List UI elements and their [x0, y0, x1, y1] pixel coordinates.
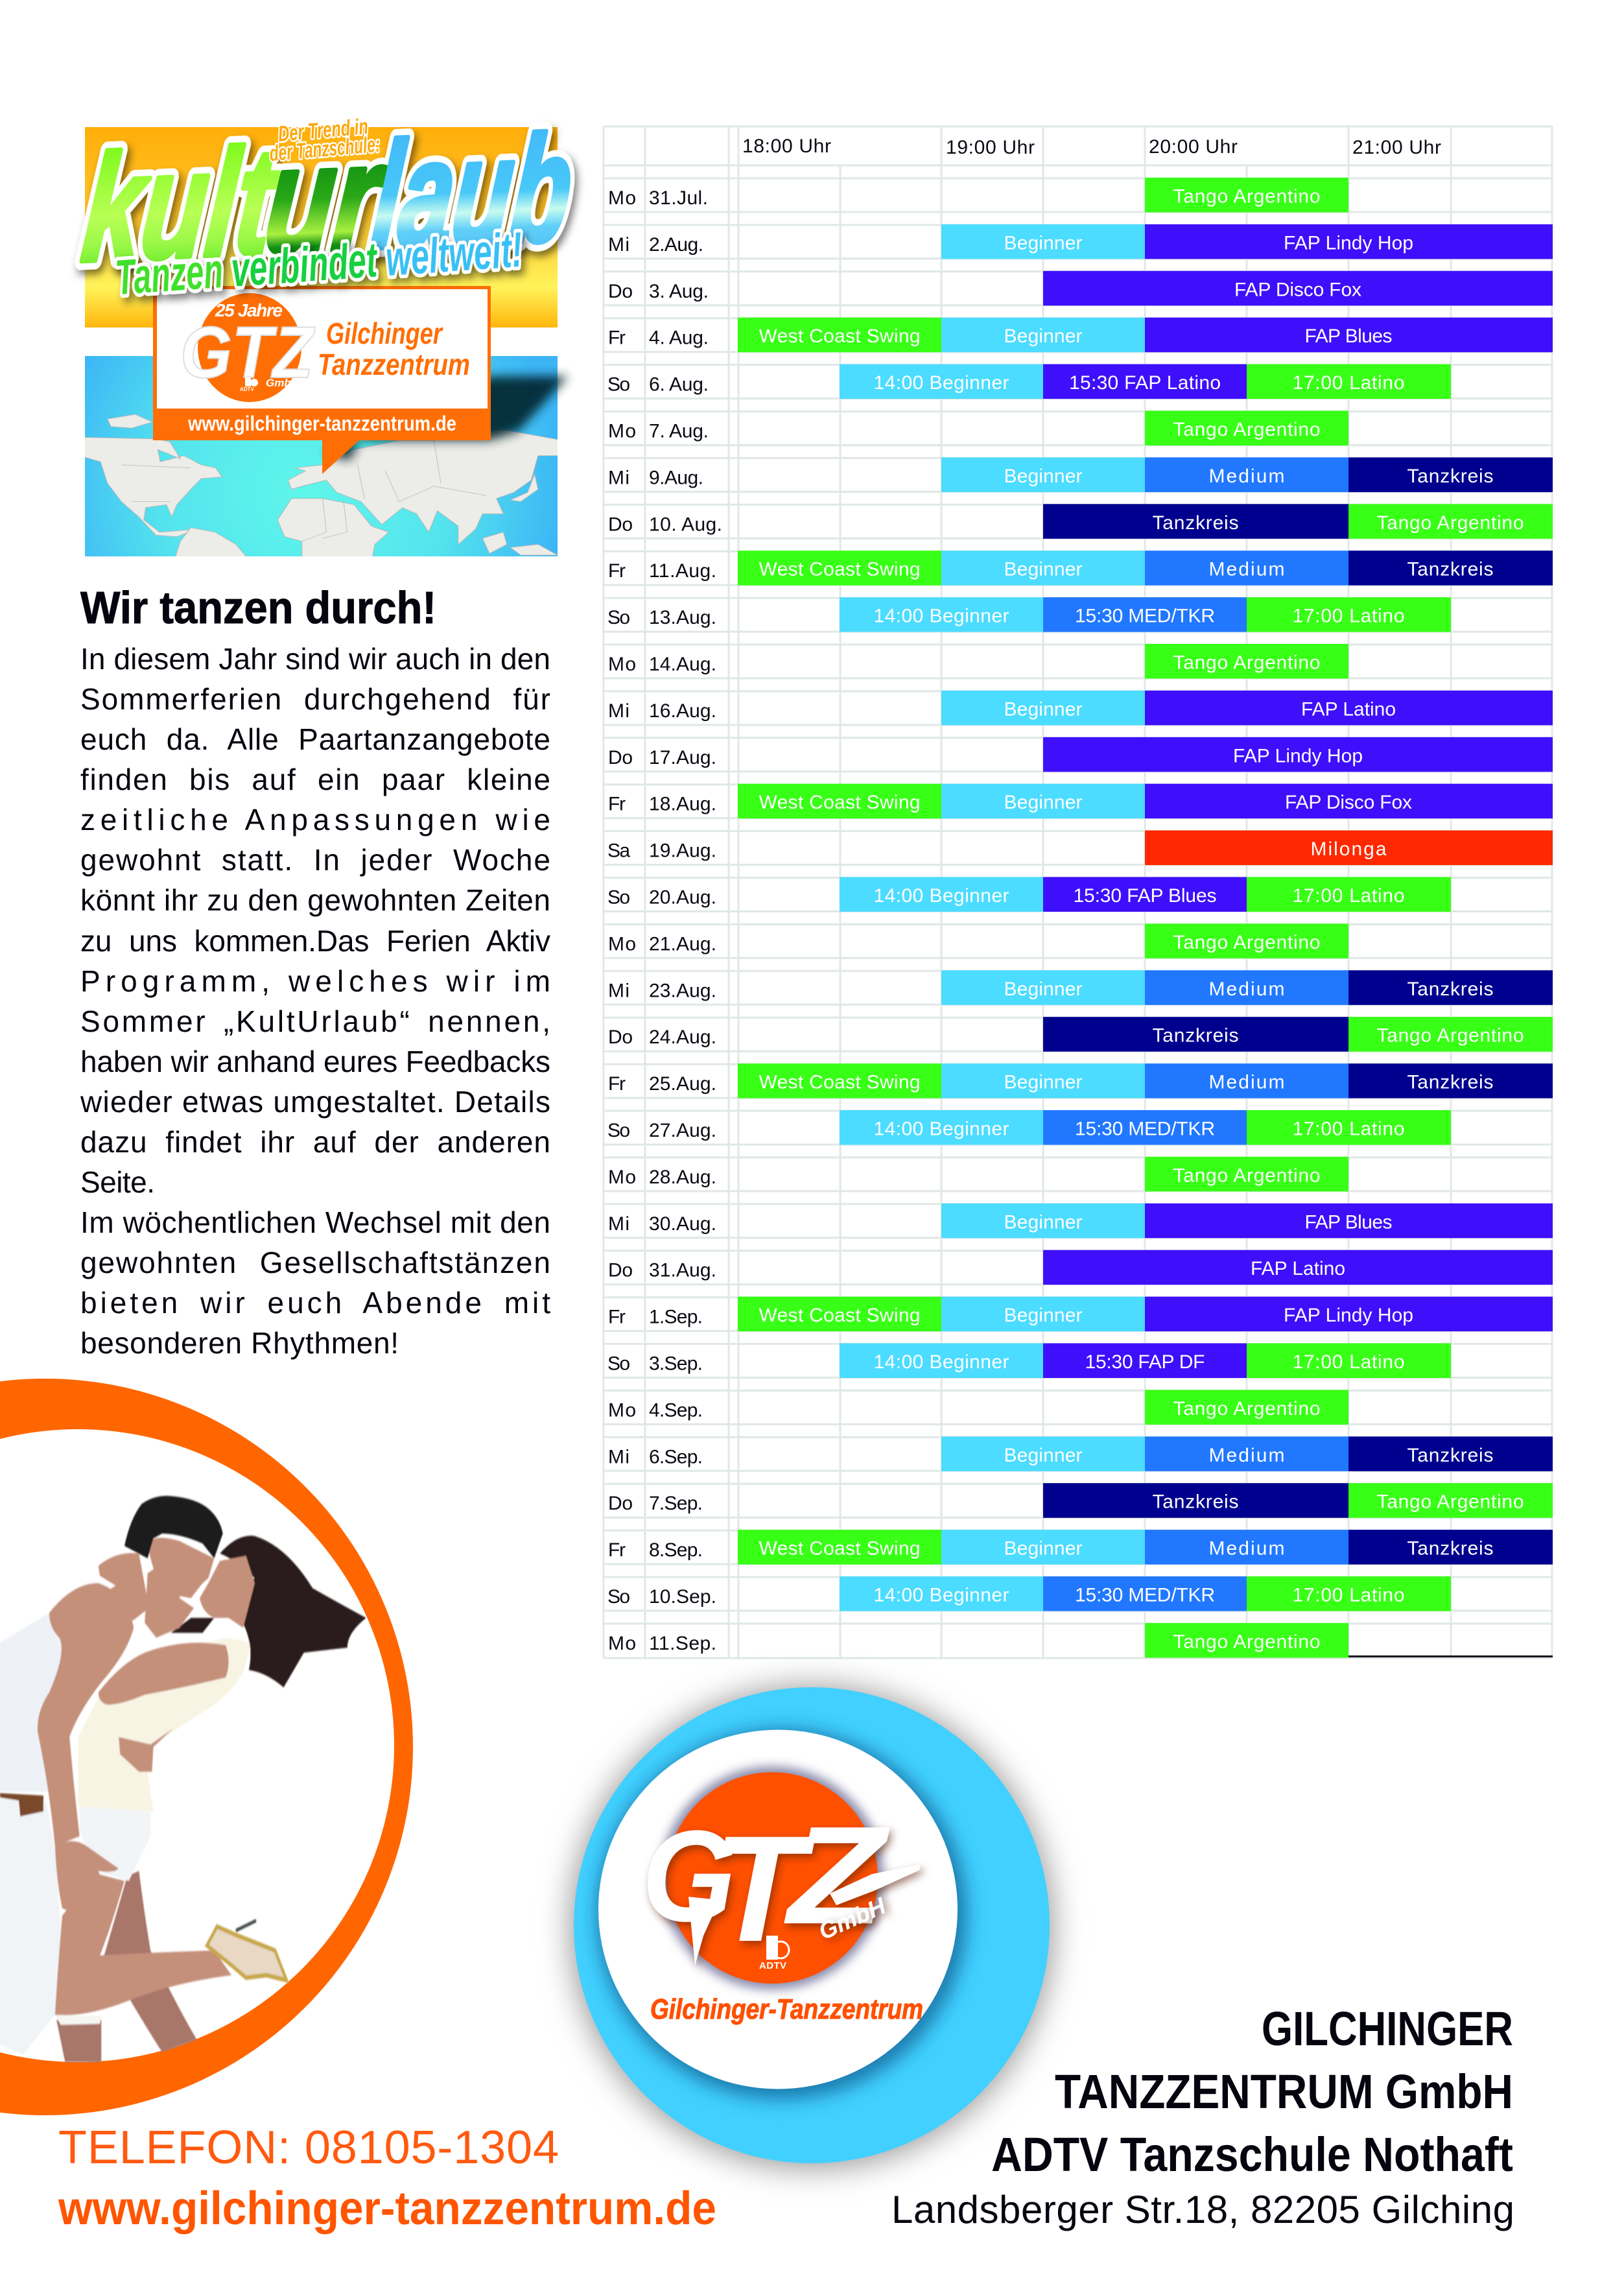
kulturlaub title: ur — [259, 112, 392, 285]
orange ring with dancing couple — [0, 1379, 413, 2115]
tagline: Der Trend in der Tanzschule: der Tanzschule: — [268, 132, 381, 166]
row: Mo 7. Aug.: Mo — [608, 420, 636, 442]
slogan: Tanzen verbindet weltweit — [113, 222, 524, 305]
body text: euch da. Alle Paartanzangebote — [80, 722, 550, 756]
kulturlaub title: laub — [366, 104, 579, 281]
row: Mo 14.Aug.: 14.Aug. — [649, 654, 716, 675]
row: So 13.Aug.: 13.Aug. — [649, 607, 716, 628]
body text: Sommerferien durchgehend für — [80, 682, 550, 716]
row: Mi 30.Aug.: FAP Blues — [1304, 1211, 1393, 1233]
row: So 3.Sep.: 17:00 Latino — [1293, 1351, 1404, 1373]
time header: 21:00 Uhr — [1352, 137, 1441, 158]
logo: 25 Jahre GTZ: 25 Jahre — [215, 300, 283, 320]
man's hair — [124, 1496, 223, 1558]
world map panel — [80, 356, 562, 563]
row: Mi 9.Aug.: Mi — [608, 467, 630, 488]
logo wordmark: Tanzzentrum — [318, 348, 470, 381]
row: So 3.Sep.: So — [607, 1353, 630, 1375]
row: Fr 25.Aug.: Beginner — [1004, 1072, 1083, 1093]
row: Mo 21.Aug.: Tango Argentino — [1173, 932, 1320, 953]
orange speech bubble — [153, 286, 491, 474]
row: Fr 25.Aug.: 25.Aug. — [649, 1073, 716, 1095]
row: Sa 19.Aug.: Sa — [607, 840, 630, 862]
row: Fr 18.Aug.: 18.Aug. — [649, 794, 716, 815]
row: Sa 19.Aug.: 19.Aug. — [649, 840, 716, 862]
row: Mo 11.Sep.: Tango Argentino — [1173, 1631, 1320, 1652]
body text: gewohnt statt. In jeder Woche — [80, 843, 550, 877]
row: Do 3. Aug.: Do — [608, 281, 633, 302]
man's arm — [38, 1583, 134, 1846]
woman's arm — [99, 1643, 229, 1705]
row: Mi 6.Sep. — [604, 1436, 1553, 1471]
row: Mi 23.Aug.: Medium — [1208, 979, 1285, 1000]
row: Fr 25.Aug.: Fr — [608, 1073, 626, 1095]
row: Do 24.Aug.: 24.Aug. — [649, 1027, 716, 1048]
row: Do 7.Sep.: Tango Argentino — [1377, 1491, 1524, 1513]
row: Fr 25.Aug.: Tanzkreis — [1407, 1072, 1494, 1093]
row: Mo 28.Aug. — [604, 1157, 1553, 1191]
row: Do 7.Sep. — [604, 1483, 1553, 1518]
row: Mi 30.Aug. — [604, 1204, 1553, 1238]
row: Fr 18.Aug.: FAP Disco Fox — [1285, 792, 1412, 813]
row: Do 31.Aug.: FAP Latino — [1251, 1258, 1345, 1279]
row: Do 10. Aug. — [604, 504, 1553, 539]
row: So 3.Sep.: 15:30 FAP DF — [1085, 1351, 1205, 1373]
row: Mo 28.Aug.: Tango Argentino — [1173, 1165, 1320, 1186]
row: Do 7.Sep.: 7.Sep. — [649, 1493, 703, 1514]
row: Do 3. Aug.: FAP Disco Fox — [1234, 279, 1361, 300]
row: Fr 25.Aug.: West Coast Swing — [759, 1072, 921, 1093]
round GTZ logo — [571, 1686, 1053, 2168]
GTZ lettering: Z — [783, 1797, 891, 1953]
woman's hand on neck — [95, 1553, 149, 1620]
row: So 6. Aug.: 6. Aug. — [649, 374, 709, 396]
row: Fr 4. Aug. — [604, 318, 1553, 352]
row: Fr 11.Aug.: 11.Aug. — [649, 560, 716, 582]
slogan: Tanzen verbindet weltweit: verbindet — [229, 232, 380, 298]
row: So 27.Aug.: 17:00 Latino — [1293, 1118, 1404, 1140]
woman's back leg — [104, 1871, 197, 2052]
company address block — [891, 2002, 1514, 2231]
row: Fr 1.Sep.: FAP Lindy Hop — [1284, 1305, 1413, 1326]
slogan: Tanzen verbindet weltweit: weltweit! — [384, 222, 524, 287]
woman's cream top — [78, 1638, 252, 1811]
woman's hand on cheek — [145, 1561, 194, 1638]
row: Do 24.Aug.: Do — [608, 1027, 633, 1048]
logo wordmark: Gilchinger — [326, 316, 443, 350]
white logo panel — [157, 289, 488, 409]
row: Fr 11.Aug.: Fr — [608, 560, 626, 582]
man's face — [148, 1537, 214, 1598]
row: Mo 21.Aug.: 21.Aug. — [649, 933, 716, 955]
time header: 20:00 Uhr — [1149, 136, 1238, 158]
row: Mo 7. Aug. — [604, 411, 1553, 445]
row: Mi 9.Aug.: Medium — [1208, 466, 1285, 487]
row: Mo 11.Sep.: Mo — [608, 1633, 636, 1654]
row: Mi 9.Aug.: 9.Aug. — [649, 467, 703, 488]
row: So 27.Aug. — [604, 1110, 1553, 1145]
row: So 3.Sep.: 3.Sep. — [649, 1353, 703, 1375]
row: Fr 4. Aug.: Fr — [608, 327, 626, 349]
row: Fr 4. Aug.: 4. Aug. — [649, 327, 709, 349]
row: Mi 2.Aug. — [604, 224, 1553, 259]
body text: wieder etwas umgestaltet. Details — [80, 1085, 550, 1119]
row: Fr 8.Sep.: West Coast Swing — [759, 1538, 921, 1560]
body text: zu uns kommen.Das Ferien Aktiv — [80, 924, 550, 958]
row: Do 31.Aug.: Do — [608, 1260, 633, 1281]
row: Mi 6.Sep.: Tanzkreis — [1407, 1445, 1494, 1466]
kulturlaub title: ur — [259, 112, 392, 285]
row: Do 31.Aug.: 31.Aug. — [649, 1260, 716, 1281]
body text: finden bis auf ein paar kleine — [80, 763, 550, 796]
row: Fr 1.Sep. — [604, 1297, 1553, 1331]
table grid — [604, 126, 1553, 1658]
row: Mi 30.Aug.: Beginner — [1004, 1211, 1083, 1233]
GTZ lettering: T — [712, 1805, 816, 1973]
row: So 6. Aug.: 14:00 Beginner — [874, 372, 1009, 394]
row: Mi 16.Aug. — [604, 691, 1553, 725]
row: Mi 9.Aug. — [604, 457, 1553, 492]
row: Fr 25.Aug. — [604, 1063, 1553, 1098]
logo: 25 Jahre GTZ: ADTV — [240, 386, 254, 392]
logo: 25 Jahre GTZ: GTZ — [180, 312, 315, 393]
row: Mi 16.Aug.: Mi — [608, 700, 630, 722]
company address block: GILCHINGER — [1262, 2002, 1513, 2056]
row: Fr 4. Aug.: FAP Blues — [1304, 326, 1393, 347]
row: Do 10. Aug.: 10. Aug. — [649, 514, 722, 535]
row: Mo 7. Aug.: Tango Argentino — [1173, 419, 1320, 440]
row: Mo 14.Aug.: Tango Argentino — [1173, 652, 1320, 673]
woman's face — [200, 1556, 255, 1628]
ADTV badge — [759, 1936, 789, 1971]
woman's shorts — [80, 1807, 150, 1881]
orange ring — [0, 1379, 413, 2115]
logo: 25 Jahre GTZ: GmbH — [266, 377, 300, 389]
row: Mi 23.Aug. — [604, 970, 1553, 1005]
dancing couple photo — [0, 1496, 366, 2062]
row: So 10.Sep.: 17:00 Latino — [1293, 1585, 1404, 1606]
row: Mi 9.Aug.: Tanzkreis — [1407, 466, 1494, 487]
row: So 10.Sep.: 14:00 Beginner — [874, 1585, 1009, 1606]
row: Do 7.Sep.: Tanzkreis — [1153, 1491, 1238, 1513]
row: Do 3. Aug. — [604, 271, 1553, 305]
row: Mi 16.Aug.: 16.Aug. — [649, 700, 716, 722]
row: Mo 14.Aug. — [604, 644, 1553, 678]
company address block: Landsberger Str.18, 82205 Gilching — [891, 2188, 1514, 2231]
dark inner shadow — [596, 1729, 967, 2100]
GTZ lettering — [642, 1797, 921, 1973]
row: Do 17.Aug.: 17.Aug. — [649, 747, 716, 768]
ADTV badge: ADTV — [759, 1960, 786, 1971]
row: Do 3. Aug.: 3. Aug. — [649, 281, 709, 302]
contact: telephone: TELEFON: 08105-1304 — [58, 2122, 559, 2174]
row: So 27.Aug.: 27.Aug. — [649, 1120, 716, 1141]
row: So 13.Aug.: So — [607, 607, 630, 628]
row: Mo 14.Aug.: Mo — [608, 654, 636, 675]
row: So 13.Aug.: 17:00 Latino — [1293, 606, 1404, 627]
row: Mi 2.Aug.: Mi — [608, 234, 630, 255]
Gilchinger-Tanzzentrum wordmark: Gilchinger-Tanzzentrum — [650, 1993, 923, 2025]
grey shadow — [571, 1686, 1053, 2168]
kulturlaub title: kult — [76, 117, 284, 293]
row: Do 10. Aug.: Tanzkreis — [1153, 512, 1238, 534]
row: Fr 8.Sep.: Tanzkreis — [1407, 1538, 1494, 1560]
row: Fr 18.Aug. — [604, 784, 1553, 818]
row: Mi 2.Aug.: Beginner — [1004, 232, 1083, 254]
row: Mi 6.Sep.: Mi — [608, 1446, 630, 1467]
row: Mi 16.Aug.: Beginner — [1004, 698, 1083, 720]
row: So 20.Aug.: So — [607, 887, 630, 908]
kulturlaub title: kult — [76, 117, 284, 293]
man's hand on thigh — [55, 1841, 119, 1918]
row: Fr 8.Sep.: Fr — [608, 1539, 626, 1561]
GTZ lettering: G — [642, 1804, 736, 1949]
row: Do 31.Aug. — [604, 1250, 1553, 1285]
row: So 27.Aug.: 15:30 MED/TKR — [1075, 1118, 1215, 1140]
row: So 13.Aug. — [604, 597, 1553, 632]
row: Mo 28.Aug.: 28.Aug. — [649, 1167, 716, 1188]
row: Fr 11.Aug.: West Coast Swing — [759, 559, 921, 580]
body text: dazu findet ihr auf der anderen — [80, 1125, 550, 1159]
row: Fr 8.Sep.: Beginner — [1004, 1538, 1083, 1560]
heel — [236, 1921, 256, 1930]
row: Fr 11.Aug.: Tanzkreis — [1407, 559, 1494, 580]
row: Fr 4. Aug.: Beginner — [1004, 326, 1083, 347]
body text: könnt ihr zu den gewohnten Zeiten — [80, 883, 550, 917]
row: Do 10. Aug.: Tango Argentino — [1377, 512, 1524, 534]
heading: Wir tanzen durch! — [80, 582, 436, 633]
row: Mo 21.Aug.: Mo — [608, 933, 636, 955]
gold sandal — [207, 1927, 287, 1980]
row: Do 7.Sep.: Do — [608, 1493, 633, 1514]
row: Mi 2.Aug.: 2.Aug. — [649, 234, 703, 255]
row: So 6. Aug.: So — [607, 374, 630, 396]
row: Do 17.Aug.: FAP Lindy Hop — [1233, 745, 1363, 766]
body text: Programm, welches wir im — [80, 964, 550, 998]
logo wordmark — [318, 316, 470, 381]
row: So 3.Sep.: 14:00 Beginner — [874, 1351, 1009, 1373]
body text: zeitliche Anpassungen wie — [80, 803, 550, 837]
row: Mi 6.Sep.: 6.Sep. — [649, 1446, 703, 1467]
row: Mo 4.Sep. — [604, 1390, 1553, 1425]
row: Fr 8.Sep.: 8.Sep. — [649, 1539, 703, 1561]
row: Mo 31.Jul.: 31.Jul. — [649, 187, 708, 209]
row: Mo 31.Jul.: Tango Argentino — [1173, 185, 1320, 208]
row: So 10.Sep.: 15:30 MED/TKR — [1075, 1585, 1215, 1606]
row: So 27.Aug.: So — [607, 1120, 630, 1141]
company address block: ADTV Tanzschule Nothaft — [991, 2128, 1513, 2181]
row: So 13.Aug.: 15:30 MED/TKR — [1075, 606, 1215, 627]
body text: Im wöchentlichen Wechsel mit den — [80, 1205, 550, 1239]
row: Fr 18.Aug.: Beginner — [1004, 792, 1083, 813]
body text: In diesem Jahr sind wir auch in den — [80, 642, 550, 676]
row: Mi 23.Aug.: Beginner — [1004, 979, 1083, 1000]
woman's hair — [220, 1536, 366, 1687]
body text: bieten wir euch Abende mit — [80, 1286, 550, 1320]
row: So 20.Aug. — [604, 877, 1553, 912]
row: So 6. Aug.: 15:30 FAP Latino — [1069, 372, 1221, 394]
row: Do 17.Aug. — [604, 737, 1553, 772]
row: Fr 4. Aug.: West Coast Swing — [759, 326, 921, 347]
row: So 10.Sep.: So — [607, 1586, 630, 1608]
body text: haben wir anhand eures Feedbacks — [80, 1045, 550, 1078]
row: Mo 31.Jul. — [604, 178, 1553, 213]
row: Mi 23.Aug.: Tanzkreis — [1407, 979, 1494, 1000]
row: So 20.Aug.: 15:30 FAP Blues — [1074, 885, 1216, 907]
row: Mi 30.Aug.: Mi — [608, 1213, 630, 1235]
row: Mo 4.Sep.: Tango Argentino — [1173, 1398, 1320, 1419]
row: Mi 2.Aug.: FAP Lindy Hop — [1284, 232, 1413, 254]
contact: website: www.gilchinger-tanzzentrum.de — [58, 2183, 716, 2235]
row: So 20.Aug.: 20.Aug. — [649, 887, 716, 908]
row: Mi 6.Sep.: Medium — [1208, 1445, 1285, 1466]
row: Fr 11.Aug.: Beginner — [1004, 559, 1083, 580]
row: Fr 1.Sep.: 1.Sep. — [649, 1307, 703, 1328]
time header: 19:00 Uhr — [946, 137, 1035, 158]
company address block: TANZZENTRUM GmbH — [1055, 2065, 1513, 2119]
row: Mo 31.Jul.: Mo — [608, 187, 636, 209]
sunset panel — [85, 127, 558, 327]
row: Fr 25.Aug.: Medium — [1208, 1072, 1285, 1093]
man's shirt — [0, 1613, 68, 1792]
tagline: Der Trend in der Tanzschule: Der Trend in — [277, 114, 369, 147]
row: Mo 11.Sep.: 11.Sep. — [649, 1633, 716, 1654]
row: Mo 28.Aug.: Mo — [608, 1167, 636, 1188]
white disc — [598, 1730, 958, 2089]
row: Do 10. Aug.: Do — [608, 514, 633, 535]
woman's lower leg behind — [56, 2020, 101, 2062]
row: So 13.Aug.: 14:00 Beginner — [874, 606, 1009, 627]
belt — [0, 1793, 43, 1816]
woman's raised leg — [55, 1873, 231, 2015]
strands behind hands — [171, 1618, 214, 1633]
row: Mi 6.Sep.: Beginner — [1004, 1445, 1083, 1466]
row: Mo 7. Aug.: 7. Aug. — [649, 420, 709, 442]
body text — [80, 642, 550, 1360]
row: So 10.Sep.: 10.Sep. — [649, 1586, 716, 1608]
row: Do 24.Aug. — [604, 1017, 1553, 1052]
row: Fr 1.Sep.: West Coast Swing — [759, 1305, 921, 1326]
row: So 6. Aug. — [604, 364, 1553, 399]
row: Fr 11.Aug.: Medium — [1208, 559, 1285, 580]
schedule table — [604, 126, 1553, 1658]
row: Mi 30.Aug.: 30.Aug. — [649, 1213, 716, 1235]
row: So 27.Aug.: 14:00 Beginner — [874, 1118, 1009, 1140]
row: Fr 1.Sep.: Beginner — [1004, 1305, 1083, 1326]
row: Sa 19.Aug. — [604, 831, 1553, 865]
tagline: Der Trend in der Tanzschule — [267, 113, 381, 166]
row: Mo 21.Aug. — [604, 923, 1553, 958]
body text: besonderen Rhythmen! — [80, 1326, 399, 1360]
row: Mo 4.Sep.: Mo — [608, 1399, 636, 1421]
row: Fr 8.Sep. — [604, 1530, 1553, 1565]
garter — [55, 2015, 101, 2025]
row: Mo 11.Sep. — [604, 1623, 1553, 1657]
row: Do 24.Aug.: Tango Argentino — [1377, 1025, 1524, 1047]
row: So 20.Aug.: 14:00 Beginner — [874, 885, 1009, 907]
row: Mi 16.Aug.: FAP Latino — [1301, 698, 1396, 720]
body text: Sommer „KultUrlaub“ nennen, — [80, 1004, 550, 1038]
orange circle shadow — [661, 1766, 884, 1989]
time header: 18:00 Uhr — [742, 136, 831, 157]
row: So 20.Aug.: 17:00 Latino — [1293, 885, 1404, 907]
GmbH: GmbH — [815, 1892, 890, 1945]
blue disc — [574, 1687, 1050, 2163]
row: Do 17.Aug.: Do — [608, 747, 633, 768]
url in bubble: www.gilchinger-tanzzentrum.de — [187, 412, 456, 435]
time header — [742, 136, 1441, 158]
man's white trousers — [0, 1797, 64, 2054]
orange circle — [666, 1772, 878, 1984]
row: Mi 9.Aug.: Beginner — [1004, 466, 1083, 487]
row: So 6. Aug.: 17:00 Latino — [1293, 372, 1404, 394]
callout shadow — [324, 376, 568, 460]
row: So 10.Sep. — [604, 1576, 1553, 1611]
row: Fr 1.Sep.: Fr — [608, 1307, 626, 1328]
slogan: Tanzen verbindet weltweit: Tanzen — [113, 243, 225, 305]
row: Sa 19.Aug.: Milonga — [1311, 838, 1387, 860]
body text: Seite. — [80, 1165, 155, 1199]
row: Mi 23.Aug.: 23.Aug. — [649, 980, 716, 1001]
row: Mi 23.Aug.: Mi — [608, 980, 630, 1001]
kulturlaub title: laub — [366, 104, 579, 281]
row: Fr 18.Aug.: Fr — [608, 794, 626, 815]
row: Mo 4.Sep.: 4.Sep. — [649, 1399, 703, 1421]
row: Fr 18.Aug.: West Coast Swing — [759, 792, 921, 813]
row: Fr 8.Sep.: Medium — [1208, 1538, 1285, 1560]
row: So 3.Sep. — [604, 1344, 1553, 1378]
kulturlaub poster image — [76, 104, 579, 563]
row: Do 24.Aug.: Tanzkreis — [1153, 1025, 1238, 1047]
man's hand on waist — [119, 1728, 174, 1772]
row: Fr 11.Aug. — [604, 551, 1553, 586]
body text: gewohnten Gesellschaftstänzen — [80, 1246, 550, 1279]
kulturlaub title — [76, 104, 579, 293]
